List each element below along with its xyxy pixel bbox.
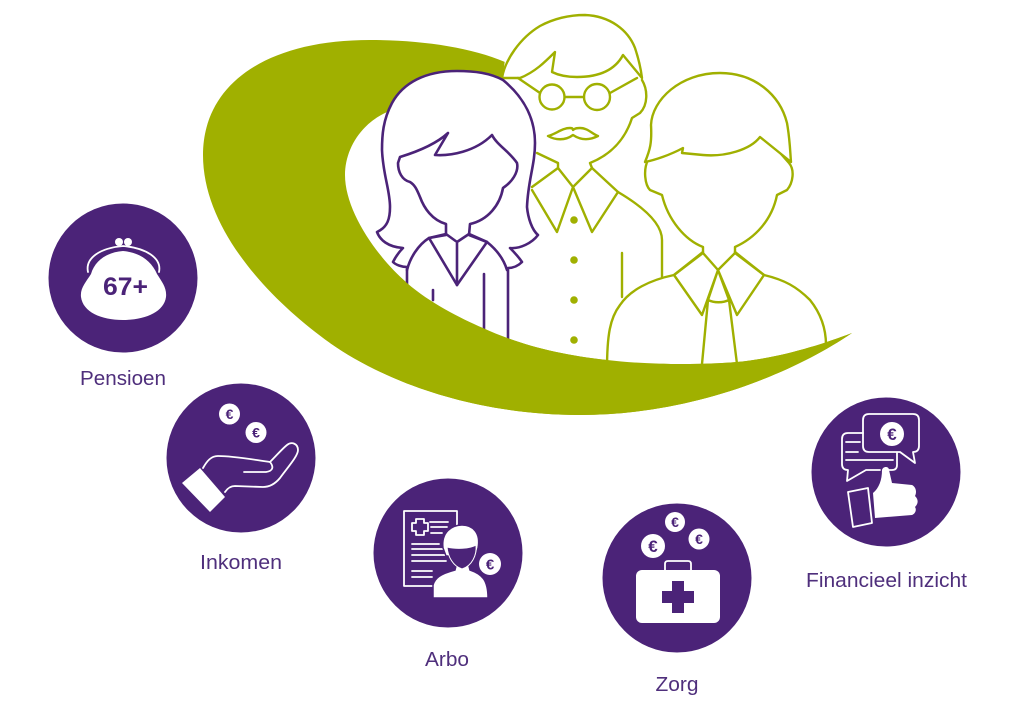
label: Arbo: Arbo	[425, 649, 469, 671]
panel: Zorg	[602, 504, 752, 696]
green swoosh	[203, 40, 852, 415]
icon: hand with coins: €	[226, 406, 234, 422]
icon: purse: 67+	[103, 273, 148, 301]
icon: first aid case with coins: €	[648, 537, 658, 556]
panel: Arbo	[374, 478, 522, 671]
icon: first aid case with coins: €	[695, 531, 703, 547]
icon: speech bubbles with thumbs up: €	[887, 425, 897, 444]
person: man with tie	[607, 73, 826, 370]
panel: Pensioen	[48, 204, 198, 390]
icon: purse	[81, 238, 166, 320]
panel: Inkomen	[166, 384, 316, 574]
person: woman	[377, 71, 538, 340]
swoosh lower overlay	[300, 185, 852, 415]
icon: speech bubbles with thumbs up	[842, 414, 919, 527]
icon: hand with coins	[182, 404, 298, 512]
person: man with glasses and moustache	[502, 15, 662, 345]
icon: medical document with person and coin	[404, 511, 501, 598]
icon: first aid case with coins	[636, 512, 720, 623]
label: Inkomen: Inkomen	[200, 552, 282, 574]
panel: Financieel inzicht	[806, 398, 967, 592]
icon: hand with coins: €	[252, 424, 260, 440]
label: Zorg: Zorg	[656, 674, 698, 696]
icon: medical document with person and coin: €	[486, 556, 495, 574]
label: Pensioen: Pensioen	[80, 368, 166, 390]
label: Financieel inzicht: Financieel inzicht	[806, 570, 967, 592]
icon: first aid case with coins: €	[671, 514, 679, 530]
